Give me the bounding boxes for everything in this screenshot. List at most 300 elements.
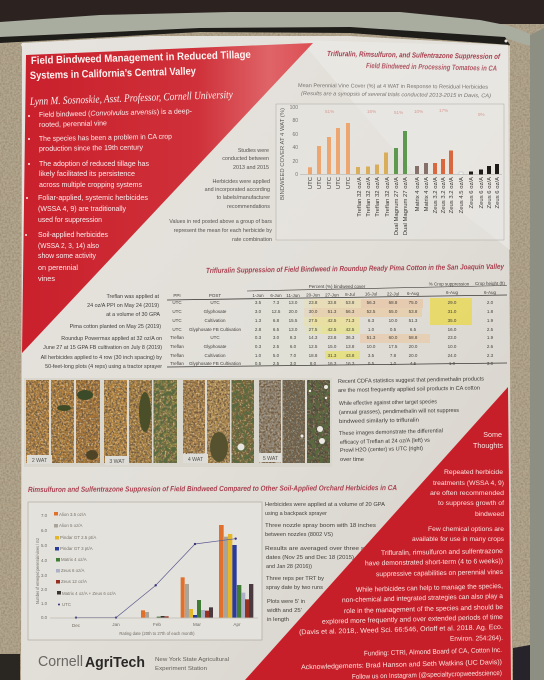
rows: 7.3 — [273, 300, 280, 305]
text block: bullet list: Foliar-applied, systemic herbicides — [38, 193, 148, 202]
week label: 5 WAT — [263, 456, 279, 462]
header labels: 6-Aug — [446, 290, 458, 295]
text block: cotton methods: 24 oz/A PPI on May 24 (2019) — [87, 303, 159, 309]
text block: CDFA notes: Prowl H2O (center) vs UTC (right) — [340, 446, 423, 454]
header labels: 11-Jun — [286, 293, 300, 298]
rows: 1.0 — [368, 327, 375, 332]
rows: 2.3 — [487, 353, 494, 358]
rows: 18.8 — [309, 353, 318, 358]
rows: 29.0 — [448, 300, 457, 305]
title — [30, 49, 251, 82]
category labels: Zeus 3.2 oz/A — [441, 177, 447, 213]
text block: conclusions: to suppress growth of — [438, 500, 504, 507]
text block: CDFA notes: efficacy of Treflan at 24 oz/A (left) vs — [340, 438, 430, 446]
text block: conclusions: non-chemical and integrated strategies can also play a — [342, 593, 503, 604]
category labels: UTC — [336, 176, 342, 189]
rows: 10.0 — [389, 318, 398, 323]
text block: conclusions: role in the management of the species and should be — [344, 604, 503, 615]
title: Field Bindweed Management in Reduced Tillage — [31, 49, 251, 67]
rows: 14.3 — [309, 335, 318, 340]
rows: 56.3 — [367, 300, 376, 305]
text block: conclusions: bindweed — [475, 511, 504, 518]
text block: bullet list: (WSSA 4, 9) are traditionally — [38, 204, 126, 213]
legend: Matrix 4 oz/A + Zeus 6 oz/A — [62, 591, 116, 596]
text block: orchard methods: Plots were 5’ in — [267, 599, 305, 605]
rows: Treflan — [170, 361, 184, 366]
text block: cotton methods: at a volume of 30 GPA — [106, 312, 160, 318]
text block: conclusions: explored more frequently and over extended periods of time — [322, 614, 503, 626]
text block: study notes: represent the mean for each herbicide by — [174, 228, 272, 234]
rows: 17.5 — [389, 344, 398, 349]
y axis labels: 60 — [292, 132, 298, 138]
text block: cotton methods: Pima cotton planted on May 25 (2019) — [70, 324, 161, 330]
y axis title: Number of emerged perennial vines / m2 — [35, 537, 40, 604]
institution name: Experiment Station — [155, 666, 207, 672]
text block: conclusions: are often recommended — [430, 490, 504, 497]
rows: 6.3 — [368, 318, 375, 323]
heading: tomato trials — [327, 49, 501, 73]
text block: conclusions: Repeated herbicide — [444, 469, 503, 476]
legend: Alion 3.5 oz/A — [59, 512, 86, 517]
rows: UTC — [172, 327, 182, 332]
rows: 31.0 — [448, 309, 457, 314]
category labels: Zeus 6 oz/A — [487, 177, 493, 208]
rows: 6.0 — [290, 344, 297, 349]
rows: 16.3 — [328, 361, 337, 366]
header labels: 6-Aug — [407, 291, 419, 296]
month labels: Dec — [72, 623, 81, 628]
text block: study notes: recommendations — [227, 204, 270, 210]
rows: 1.8 — [487, 309, 494, 314]
text block: conclusions: Trifluralin, rimsulfuron and sulfentrazone — [381, 548, 503, 557]
text block: CDFA notes: (annual grasses), pendimethalin will not suppress — [339, 408, 459, 416]
text block: study notes: to labels/manufacturer — [217, 195, 270, 201]
mean values in red: 9% — [478, 112, 485, 117]
rows: 3.0 — [273, 335, 280, 340]
text block: study notes: conducted between — [222, 156, 269, 162]
photo set: 4 WAT — [183, 380, 254, 463]
rows: Glyphosate — [204, 344, 227, 349]
rows: 71.3 — [346, 318, 355, 323]
photo set: 3 WAT — [104, 380, 177, 465]
category labels: Zeus 3.2 oz/A — [449, 177, 455, 213]
bar chart: bindweed cover — [276, 104, 504, 240]
legend: Pindar GT 2.5 pt/A — [60, 535, 96, 540]
rows: 75.0 — [409, 300, 418, 305]
rows: 23.8 — [309, 300, 318, 305]
text block: bullet list: show some activity — [38, 251, 96, 260]
text block: bullet list: The species has been a problem in CA crop — [39, 132, 172, 143]
rows: 55.0 — [389, 309, 398, 314]
rows: 15.0 — [328, 344, 337, 349]
y axis values: 5.0 — [41, 543, 48, 548]
text block: orchard methods: Three nozzle spray boom with 18 inches — [265, 523, 376, 529]
category labels: Zeus 4.5 oz/A — [459, 177, 465, 213]
text block: orchard methods — [265, 502, 385, 623]
rows: Glyphosate FB Cultivation — [189, 327, 242, 332]
rows: 13.8 — [346, 344, 355, 349]
heading: some thoughts: Thoughts — [473, 441, 503, 450]
header labels: 6-Jun — [270, 293, 282, 298]
legend: Zeus 6 oz/A — [61, 568, 84, 573]
heading: some thoughts: Some — [483, 430, 502, 439]
logo: Cornell AgriTech: Cornell — [38, 654, 83, 670]
header labels: 22-Jul — [387, 292, 399, 296]
text block: CDFA notes — [338, 376, 484, 463]
category labels: Treflan 32 oz/A — [357, 177, 363, 217]
rows: 6.5 — [410, 327, 417, 332]
text block: CDFA notes: While effective against other target species — [339, 399, 437, 407]
rows: Treflan — [170, 353, 184, 358]
category labels: UTC — [308, 176, 314, 189]
rows: 8.3 — [290, 335, 297, 340]
bar and line chart: orchard herbicides — [28, 502, 262, 640]
title: Systems in California’s Central Valley — [30, 65, 196, 82]
text block: study notes: Studies were — [238, 148, 269, 154]
legend: Matrix 4 oz/A — [61, 557, 87, 562]
rows: 3.0 — [487, 361, 494, 366]
text block: orchard methods: spray date by two runs — [266, 585, 323, 591]
institution name: New York State Agricultural — [155, 657, 229, 663]
y axis values — [41, 513, 48, 620]
legend: Alion 5 oz/A — [59, 523, 83, 528]
legend: UTC — [62, 602, 71, 607]
rows: 16.3 — [346, 361, 355, 366]
panel: red thoughts triangle — [245, 387, 511, 680]
y axis labels: 40 — [292, 145, 298, 151]
rows: 4.5 — [410, 361, 417, 366]
rows: 42.5 — [328, 327, 337, 332]
rows: 60.0 — [389, 335, 398, 340]
week label: 3 WAT — [109, 459, 125, 465]
mean values in red: 51% — [325, 109, 334, 114]
text block: orchard methods: Herbicides were applied at a volume of 20 GPA — [265, 502, 385, 508]
text block: bullet list: on perennial — [38, 263, 78, 272]
cell highlights — [252, 298, 472, 367]
y axis labels — [290, 105, 298, 178]
UTC line — [75, 537, 237, 619]
text block: bullet list: Soil-applied herbicides — [38, 230, 108, 239]
y axis values: 1.0 — [41, 601, 48, 606]
text block: cotton methods: Treflan was applied at — [106, 294, 159, 300]
text block: study notes: Values in red posted above a group of bars — [169, 219, 272, 225]
y axis values: 6.0 — [41, 528, 48, 533]
rows: 68.8 — [389, 300, 398, 305]
legend: Pindar GT 3 pt/A — [60, 546, 93, 551]
rows: 20.0 — [409, 344, 418, 349]
rows: 15.5 — [289, 318, 298, 323]
y axis labels: 0 — [295, 172, 298, 178]
rows: 0.3 — [255, 344, 262, 349]
text block: bullet list: The adoption of reduced tillage has — [39, 159, 149, 168]
text block: cotton methods: 50-feet-long plots (4 reps) using a tractor sprayer — [45, 364, 162, 370]
month labels: Mar — [193, 622, 201, 627]
text block: bullet list: rooted, perennial vine — [39, 118, 107, 129]
rows: 2.5 — [273, 361, 280, 366]
rows: 23.0 — [448, 335, 457, 340]
rows: 2.5 — [273, 344, 280, 349]
rows: 1.3 — [255, 318, 262, 323]
chart subtitle: (Results are a synopsis of several trials conducted 2013-2015 in Davis, CA) — [301, 91, 491, 99]
category labels: Treflan 32 oz/A — [366, 177, 372, 217]
header labels: 6-Aug — [484, 290, 496, 295]
rows: 10.0 — [448, 344, 457, 349]
text block: CDFA notes: bindweed similarly to trifluralin — [339, 418, 419, 425]
rows: Treflan — [170, 344, 184, 349]
header labels: 8-Jul — [345, 292, 355, 297]
mean values in red: 10% — [414, 109, 423, 114]
text block: conclusions: Funding: CTRI, Almond Board of CA, Cotton Inc. — [364, 647, 502, 658]
legend: Zeus 12 oz/A — [61, 579, 87, 584]
y axis values: 0.0 — [41, 615, 48, 620]
heading: tomato trials: Trifluralin, Rimsulfuron, and Sulfentrazone Suppression of — [327, 49, 501, 61]
category labels: Dual Magnum 27 oz/A — [403, 177, 409, 235]
text block: conclusions: treatments (WSSA 4, 9) — [433, 480, 504, 487]
text block: cotton methods — [41, 294, 162, 370]
rows: 1.9 — [487, 318, 494, 323]
rows: 2.8 — [255, 327, 262, 332]
rows: 3.5 — [368, 353, 375, 358]
heading: orchard comparison: Rimsulfuron and Sulfentrazone Suppresion of Field Bindweed Compared to Other Soil-Applied Orchard Herbicides in CA — [28, 483, 397, 494]
category labels: Zeus 6 oz/A — [469, 177, 475, 208]
y axis values: 2.0 — [41, 587, 48, 592]
rows: 3.0 — [255, 309, 262, 314]
text block: conclusions — [299, 469, 505, 680]
chart subtitle — [298, 83, 491, 99]
category labels: Treflan 32 oz/A — [385, 177, 391, 217]
panel: red title triangle — [22, 43, 313, 353]
rows: 12.5 — [272, 309, 281, 314]
text block: conclusions: suppressive capabilities on perennial vines — [376, 569, 504, 578]
header labels: 16-Jul — [365, 292, 377, 296]
rows: Cultivation — [204, 318, 226, 323]
header labels — [173, 281, 506, 298]
category labels: Matrix 4 oz/A — [424, 177, 430, 211]
category labels: Treflan 32 oz/A — [375, 177, 381, 217]
rows: 2.5 — [487, 327, 494, 332]
rows: 43.8 — [346, 353, 355, 358]
text block: cotton methods: Roundup Powermax applied at 32 oz/A on — [61, 336, 162, 342]
rows: 1.0 — [255, 353, 262, 358]
rows: 52.5 — [367, 309, 376, 314]
text block: orchard methods: width and 25’ — [266, 608, 302, 614]
rows: 0.5 — [368, 361, 375, 366]
text block: study notes: and incorporated according — [205, 187, 270, 193]
y axis values: 3.0 — [41, 573, 48, 578]
y axis values: 4.0 — [41, 558, 48, 563]
rows: 12.5 — [309, 344, 318, 349]
rows: 30.0 — [309, 309, 318, 314]
category labels: UTC — [346, 176, 352, 189]
legend — [54, 512, 116, 607]
rows: 5.0 — [273, 353, 280, 358]
rows: 35.0 — [448, 318, 457, 323]
text block: conclusions: While herbicides can help to manage the species, — [356, 583, 503, 594]
rows: 0.5 — [390, 327, 397, 332]
rows: 27.5 — [309, 318, 318, 323]
header labels: POST — [209, 293, 221, 298]
author line: Lynn M. Sosnoskie, Asst. Professor, Cornell University — [29, 89, 233, 108]
logo: Cornell AgriTech — [38, 654, 229, 672]
rows: 3.5 — [255, 300, 262, 305]
text block: bullet list: vines — [38, 274, 55, 283]
text block: bullet list: Field bindweed (Convolvulus arvensis) is a deep- — [39, 106, 193, 119]
rows: 20.0 — [409, 353, 418, 358]
rows: 36.3 — [346, 335, 355, 340]
chart subtitle: Mean Perennial Vine Cover (%) at 4 WAT in Response to Residual Herbicides — [298, 83, 488, 91]
table: cotton results — [167, 281, 507, 367]
header labels: Percent (%) bindweed cover — [309, 284, 366, 289]
text block: bullet list: used for suppression — [38, 215, 102, 224]
y axis labels: 80 — [292, 118, 298, 124]
y axis labels: 100 — [290, 105, 298, 111]
category labels: UTC — [327, 176, 333, 189]
y axis values: 7.0 — [41, 513, 48, 518]
header labels: PPI — [173, 293, 181, 298]
institution name — [155, 657, 229, 672]
rows: 33.8 — [328, 300, 337, 305]
rows: 53.8 — [346, 300, 355, 305]
month labels: Apr — [233, 622, 241, 627]
month labels: Feb — [153, 622, 161, 627]
text block: conclusions: available for use in many crops — [412, 536, 505, 543]
rows: 31.3 — [328, 353, 337, 358]
category labels: Zeus 3.2 oz/A — [433, 177, 439, 213]
text block: conclusions: (Davis et al. 2018,. Weed Sci. 66:546, Orloff et al. 2018. Ag. Eco. — [299, 624, 503, 636]
text block: orchard methods: in length — [267, 617, 289, 623]
rows: 13.0 — [289, 327, 298, 332]
rows: 42.5 — [346, 327, 355, 332]
category labels: UTC — [317, 176, 323, 189]
rows: UTC — [210, 335, 220, 340]
text block: conclusions: Acknowledgements: Brad Hanson and Seth Watkins (UC Davis)) — [301, 659, 502, 671]
mean values in red: 16% — [367, 109, 376, 114]
text block: CDFA notes: are the most frequently applied soil products in CA cotton — [338, 386, 480, 394]
text block: cotton methods: All herbicides applied to 4 row (30 inch spacing) by — [41, 355, 162, 361]
text block: conclusions: Environ. 254:264). — [450, 635, 503, 643]
rows: 2.0 — [487, 300, 494, 305]
rows: 58.8 — [409, 335, 418, 340]
text block: orchard methods: between nozzles (8002 VS) — [265, 532, 333, 538]
rows: 1.9 — [487, 335, 494, 340]
rows: UTC — [210, 300, 220, 305]
mean values in red — [325, 108, 485, 117]
text block: orchard methods: and Jan 28 (2016)) — [266, 564, 312, 570]
mean values in red: 51% — [394, 110, 403, 115]
text block: conclusions: Few chemical options are — [428, 526, 504, 533]
header labels: 20-Jun — [306, 292, 320, 298]
rows: 42.5 — [328, 318, 337, 323]
bars — [308, 123, 499, 174]
heading: tomato trials: Field Bindweed in Processing Tomatoes in CA — [366, 61, 497, 73]
category labels: Zeus 6 oz/A — [479, 177, 485, 208]
rows: 7.0 — [290, 353, 297, 358]
header labels: 1-Jun — [252, 293, 264, 298]
week label: 2 WAT — [32, 458, 48, 464]
text block: conclusions: have demonstrated short-term (4 to 6 weeks)) — [365, 558, 503, 567]
rows: 6.5 — [273, 327, 280, 332]
rows: 20.0 — [289, 309, 298, 314]
y axis title: BINDWEED COVER AT 4 WAT (%) — [280, 108, 286, 200]
text block: study notes: 2013 and 2015 — [233, 165, 269, 171]
rows: UTC — [172, 300, 182, 305]
rows: 56.3 — [346, 309, 355, 314]
text block: bullet list: across multiple cropping systems — [39, 180, 142, 189]
text block: bullet list: (WSSA 2, 3, 14) also — [38, 241, 99, 250]
rows: 10.0 — [367, 344, 376, 349]
text block: study notes — [169, 148, 272, 243]
text block: orchard methods: using a backpack sprayer — [265, 511, 327, 517]
rows: UTC — [172, 318, 182, 323]
heading: some thoughts — [473, 430, 503, 450]
text block: orchard methods: Results are averaged over three spray — [265, 546, 377, 552]
header labels: 27-Jun — [325, 292, 339, 298]
rows: 2.6 — [487, 344, 494, 349]
header labels: Crop height (ft) — [475, 281, 506, 286]
photo set: 5 WAT — [259, 380, 330, 463]
rows: 24.0 — [448, 353, 457, 358]
category labels: Matrix 4 oz/A — [415, 177, 421, 211]
rows: Glyphosate FB Cultivation — [189, 361, 242, 366]
y axis labels: 20 — [292, 159, 298, 165]
rows: 51.3 — [328, 309, 337, 314]
text block: bullet list: production since the 19th century — [39, 143, 143, 153]
rows: 1.0 — [449, 361, 456, 366]
text block: cotton methods: June 27 at 15 GPA FB cultivation on July 8 (2019) — [43, 345, 162, 351]
rows: 1.0 — [390, 361, 397, 366]
rows: 51.3 — [367, 335, 376, 340]
x axis title: Rating date (20th to 27th of each month) — [119, 631, 195, 636]
rows: Glyphosate — [204, 309, 227, 314]
rows: Treflan — [170, 335, 184, 340]
text block: CDFA notes: over time — [340, 457, 364, 463]
month labels: Jan — [112, 622, 120, 627]
text block: study notes: Herbicides were applied — [212, 179, 270, 185]
rows: UTC — [172, 309, 182, 314]
week label: 4 WAT — [188, 457, 204, 463]
rows: 53.8 — [409, 309, 418, 314]
text block: bullet list — [25, 106, 193, 283]
text block: bullet list: likely facilitated its persistence — [39, 169, 135, 178]
rows: 16.0 — [448, 327, 457, 332]
category labels: Zeus 6 oz/A — [495, 177, 501, 208]
rows: 3.0 — [290, 361, 297, 366]
month labels — [72, 622, 241, 628]
rows: 0.3 — [255, 335, 262, 340]
category labels: Dual Magnum 27 oz/A — [394, 177, 400, 235]
logo: Cornell AgriTech: AgriTech — [85, 655, 145, 671]
bars — [141, 525, 253, 618]
text block: CDFA notes: These images demonstrate the differential — [339, 428, 443, 437]
rows: 23.8 — [328, 335, 337, 340]
mean values in red: 17% — [439, 108, 448, 113]
rows — [170, 300, 494, 366]
rows: 0.5 — [255, 361, 262, 366]
rows: 6.8 — [273, 318, 280, 323]
photo set: 2 WAT — [26, 380, 100, 464]
text block: study notes: rate combination — [232, 237, 272, 243]
rows: 13.0 — [289, 300, 298, 305]
header rules — [167, 286, 507, 367]
text block: orchard methods: Three reps per TRT by — [266, 576, 324, 582]
rows: 8.0 — [310, 361, 317, 366]
category labels — [308, 176, 501, 235]
rows: 51.3 — [409, 318, 418, 323]
rows: 7.8 — [390, 353, 397, 358]
rows: Cultivation — [204, 353, 226, 358]
header labels: % Crop suppression — [429, 282, 470, 286]
rows: 27.5 — [309, 327, 318, 332]
